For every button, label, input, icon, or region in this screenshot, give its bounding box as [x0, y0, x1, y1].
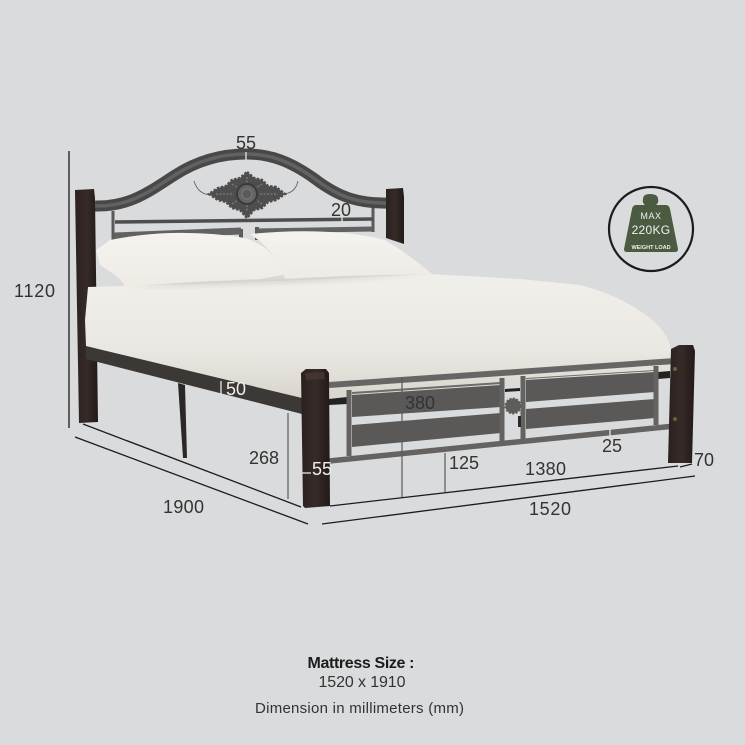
rosette — [506, 398, 521, 427]
badge text: MAX — [640, 211, 662, 221]
weight icon — [624, 194, 678, 252]
label 70: 70 — [694, 450, 714, 470]
units note: Dimension in millimeters (mm) — [255, 700, 464, 717]
left pillow — [96, 233, 287, 287]
pillows — [96, 231, 432, 288]
label 1380: 1380 — [525, 459, 566, 479]
right foot post — [668, 345, 695, 463]
label 50: 50 — [226, 379, 246, 399]
vertical bars — [349, 366, 656, 456]
headboard — [75, 154, 404, 423]
dimension lines — [69, 151, 695, 524]
right pillow — [250, 231, 432, 279]
pillow shadow — [125, 275, 432, 288]
centre leg — [178, 383, 187, 458]
side rail — [86, 346, 302, 414]
right panels — [526, 372, 655, 429]
headboard bars — [113, 208, 373, 240]
panel top strip — [352, 370, 655, 394]
weight badge: 220KG — [632, 223, 670, 237]
mattress — [85, 274, 671, 400]
weight badge: WEIGHT LOAD — [631, 245, 671, 251]
label 25: 25 — [602, 436, 622, 456]
vertical measure lines — [288, 377, 445, 499]
scroll wires — [194, 181, 298, 195]
ornament — [209, 172, 285, 218]
mattress size heading: Mattress Size : — [308, 655, 414, 672]
label 125: 125 — [449, 453, 479, 473]
label 268: 268 — [249, 448, 279, 468]
mattress size value: 1520 x 1910 — [318, 674, 406, 691]
label 55 left: 55 — [312, 459, 332, 479]
label 1900: 1900 — [163, 497, 204, 517]
weight badge — [609, 187, 693, 271]
left foot post — [301, 369, 330, 508]
side frame — [86, 346, 302, 458]
badge ring — [609, 187, 693, 271]
left panels — [352, 385, 501, 447]
footboard — [301, 345, 695, 508]
dimension labels — [14, 133, 714, 519]
label 380: 380 — [405, 393, 435, 413]
label 1520: 1520 — [529, 499, 571, 519]
label 20: 20 — [331, 200, 351, 220]
top rail — [329, 361, 675, 385]
label 1120: 1120 — [14, 281, 55, 301]
right headboard post — [386, 188, 404, 244]
label 55 top: 55 — [236, 133, 256, 153]
dark under mattress — [329, 371, 670, 405]
white ticks — [221, 152, 610, 473]
left post — [75, 189, 98, 423]
curved top rail — [95, 154, 392, 206]
bottom rail — [329, 426, 675, 461]
